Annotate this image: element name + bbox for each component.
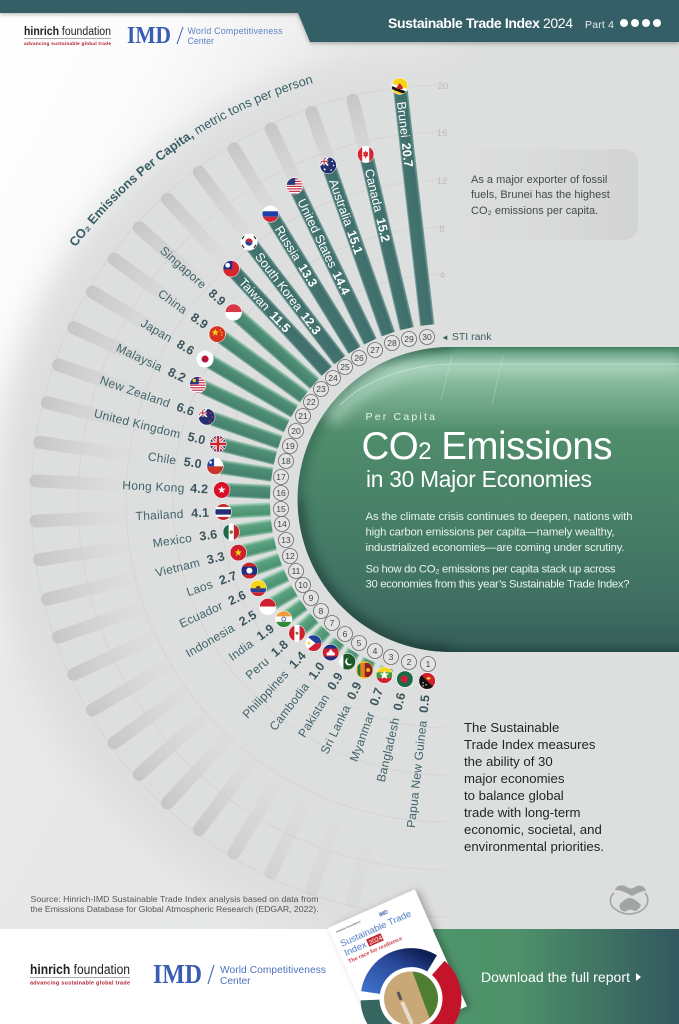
rank 8: [314, 604, 328, 618]
bar 29 Canada: Canada 15.2: [362, 168, 393, 243]
report cover: 2024: [368, 934, 384, 947]
pill body text: high carbon emissions per capita—namely wealthy,: [366, 526, 614, 538]
pill body text: So how do CO₂ emissions per capita stack up across: [366, 564, 616, 576]
footer logo: IMD: [153, 959, 326, 989]
index description text: major economies: [464, 771, 565, 786]
rank 1: [420, 656, 436, 672]
bar 22 China: China 8.9: [155, 286, 211, 332]
rank 12: [282, 548, 298, 564]
bar 29 Canada: [357, 146, 414, 330]
rank 28: 28: [387, 338, 397, 348]
rank 25: [338, 360, 352, 374]
bar 22 China: [159, 290, 308, 402]
bar 10 Indonesia: Indonesia 2.5: [183, 608, 259, 660]
scale labels: 8: [439, 224, 445, 235]
rank 3: [384, 650, 398, 664]
bar 9 India: India 1.9: [226, 621, 277, 664]
bar 21 Japan: [136, 312, 300, 421]
bar 6 Cambodia: [270, 637, 345, 730]
header title: Part 4: [585, 19, 614, 31]
pill body text: [366, 511, 632, 590]
panel: title pill: [298, 347, 679, 652]
rank 9: [304, 590, 318, 606]
pill kicker: Per Capita: [366, 411, 437, 423]
bar 13 Vietnam: Vietnam 3.3: [154, 549, 226, 580]
scale labels: 12: [437, 176, 447, 187]
header title: [388, 15, 661, 31]
rank 11: 11: [292, 566, 301, 576]
rank 6: [338, 626, 352, 642]
rank 7: 7: [330, 618, 335, 628]
callout: Brunei: As a major exporter of fossil: [471, 174, 607, 186]
rank 13: [278, 532, 294, 548]
rank 2: 2: [407, 657, 412, 667]
rank 10: 10: [298, 580, 308, 590]
footer: white band: [0, 929, 679, 1024]
pill body text: 30 economies from this year’s Sustainable Trade Index?: [366, 578, 630, 590]
bar 8 Peru: [245, 612, 319, 680]
icon: brand globe: [610, 885, 648, 914]
rank 27: [368, 342, 382, 358]
bar 16 Hong Kong: [123, 480, 270, 500]
rank 26: 26: [354, 353, 364, 363]
bar 24 Taiwan: [222, 260, 332, 376]
bar 25 South Korea: South Korea 12.3: [252, 250, 324, 337]
rank 13: 13: [281, 535, 291, 545]
bar 12 Laos: Laos 2.7: [185, 568, 239, 599]
bar 17 Chile: Chile 5.0: [147, 449, 203, 471]
rank 9: 9: [309, 593, 314, 603]
index description text: Trade Index measures: [464, 737, 596, 752]
bar 16 Hong Kong: Hong Kong 4.2: [122, 478, 209, 496]
bar 21 Japan: Japan 8.6: [138, 316, 197, 358]
rank 14: 14: [277, 519, 287, 529]
bar 26 Russia: Russia 13.3: [272, 223, 320, 289]
report cover: [328, 889, 467, 1024]
bar 14 Mexico: [153, 519, 273, 548]
rank 15: 15: [276, 504, 286, 514]
bar 4 Sri Lanka: [321, 656, 376, 754]
logo: IMD: World Competitiveness: [188, 26, 283, 36]
rank 5: [352, 636, 366, 650]
bar 28 Australia: [320, 156, 395, 336]
rank 2: [402, 654, 416, 670]
rank 20: 20: [291, 426, 301, 436]
footer logo: IMD: Center: [220, 976, 251, 987]
bar 7 Philippines: [242, 625, 331, 718]
bar 27 United States: [286, 177, 377, 345]
scale arcs: [31, 85, 447, 917]
bar 12 Laos: [186, 552, 282, 596]
bar 26 Russia: [262, 206, 360, 354]
source note: Source: Hinrich-IMD Sustainable Trade Index analysis based on data from: [30, 894, 318, 904]
rank 17: 17: [276, 472, 286, 482]
footer logo: hinrich foundation: hinrich foundation: [30, 962, 130, 977]
bar 20 Malaysia: [116, 344, 290, 432]
rank 26: [352, 350, 366, 366]
rank 24: 24: [328, 373, 338, 383]
rank 21: [296, 408, 310, 424]
bar 23 Singapore: Singapore 8.9: [157, 244, 228, 309]
scale labels: [437, 81, 448, 281]
logo: hinrich foundation: hinrich foundation: [24, 26, 111, 38]
rank 22: [304, 394, 318, 410]
bar 19 New Zealand: [100, 376, 282, 449]
chart title on arc: CO₂ Emissions Per Capita, metric tons per person: [70, 77, 313, 246]
rank 28: [384, 336, 400, 350]
bar 15 Thailand: Thailand 4.1: [135, 506, 210, 523]
logo: hinrich foundation: [24, 26, 111, 47]
bar 18 United Kingdom: United Kingdom 5.0: [92, 406, 207, 448]
bar 3 Myanmar: Myanmar 0.7: [347, 686, 386, 764]
rank 24: [326, 370, 340, 386]
source note: [30, 894, 318, 914]
rank 6: 6: [343, 629, 348, 639]
index description text: economic, societal, and: [464, 822, 602, 837]
bar 14 Mexico: Mexico 3.6: [152, 527, 218, 550]
pill heading: CO2 Emissions: [362, 425, 612, 468]
logo: IMD: IMD: [127, 23, 171, 49]
scale labels: 4: [439, 270, 445, 281]
bar 18 United Kingdom: [94, 409, 277, 465]
logo: IMD: Center: [188, 36, 214, 46]
bar 15 Thailand: [136, 502, 270, 520]
rank 30: 30: [422, 332, 432, 342]
bar 13 Vietnam: [154, 536, 277, 576]
bar 17 Chile: [148, 452, 273, 482]
report cover: Index: [343, 939, 369, 959]
bar 23 Singapore: [160, 247, 320, 389]
bar 8 Peru: Peru 1.8: [243, 637, 291, 682]
rank 16: [274, 486, 288, 500]
bar 19 New Zealand: New Zealand 6.6: [98, 373, 196, 419]
STI rank note: ◄ STI rank: [441, 331, 492, 343]
rank 29: 29: [404, 334, 414, 344]
rank 15: [274, 502, 288, 516]
rank 23: [314, 382, 328, 396]
rank 7: [324, 616, 340, 630]
index description text: [464, 720, 604, 854]
bar 5 Pakistan: Pakistan 0.9: [295, 670, 346, 740]
callout: Brunei: fuels, Brunei has the highest: [471, 189, 610, 201]
download call to action: Download the full report: [481, 969, 630, 985]
report cover: Sustainable Trade: [339, 909, 413, 950]
header band: [0, 0, 679, 42]
rank 1: 1: [426, 659, 431, 669]
rank 18: [278, 454, 294, 468]
rank 21: 21: [298, 411, 308, 421]
rank 19: 19: [285, 441, 295, 451]
callout: Brunei: CO₂ emissions per capita.: [471, 205, 598, 217]
bar 1 Papua New Guinea: Papua New Guinea 0.5: [404, 694, 433, 829]
rank 17: [274, 470, 288, 484]
report cover: hinrich foundation: [336, 919, 361, 934]
rank 5: 5: [357, 638, 362, 648]
bar 25 South Korea: [240, 234, 346, 364]
bar 2 Bangladesh: [376, 670, 414, 782]
bar 9 India: [228, 598, 308, 661]
rank 11: [288, 564, 304, 578]
header title: Sustainable Trade Index 2024: [388, 15, 573, 31]
rank 23: 23: [316, 384, 326, 394]
bar 4 Sri Lanka: Sri Lanka 0.9: [318, 679, 365, 756]
index description text: the ability of 30: [464, 754, 553, 769]
scale labels: 20: [438, 81, 448, 92]
bar 11 Ecuador: Ecuador 2.6: [177, 588, 248, 631]
rank 14: [274, 516, 290, 532]
rank badges: [274, 330, 436, 672]
bar 30 Brunei: Brunei 20.7: [394, 101, 415, 168]
rank 4: [368, 644, 382, 658]
rank 18: 18: [281, 456, 291, 466]
bar 10 Indonesia: [186, 584, 298, 658]
footer logo: hinrich foundation: [30, 962, 130, 986]
rank 27: 27: [370, 345, 380, 355]
logo: IMD: [127, 23, 283, 49]
index description text: trade with long-term: [464, 805, 581, 820]
bar 3 Myanmar: [350, 665, 394, 762]
pill body text: industrialized economies—are coming under scrutiny.: [366, 542, 624, 554]
callout: Brunei: [450, 149, 638, 240]
footer logo: IMD: IMD: [153, 959, 202, 989]
bar 28 Australia: Australia 15.1: [326, 177, 365, 256]
index description text: to balance global: [464, 788, 564, 803]
rank 22: 22: [306, 397, 316, 407]
rank 19: [282, 438, 298, 454]
rank 12: 12: [285, 551, 295, 561]
bar 6 Cambodia: Cambodia 1.0: [266, 659, 328, 733]
footer logo: IMD: World Competitiveness: [220, 965, 326, 976]
bar 2 Bangladesh: Bangladesh 0.6: [374, 691, 408, 783]
index description text: The Sustainable: [464, 720, 559, 735]
rank 25: 25: [340, 362, 350, 372]
logo: hinrich foundation: advancing sustainable global trade: [24, 41, 111, 47]
pill body text: As the climate crisis continues to deepen, nations with: [366, 511, 632, 523]
background ghost rays: [29, 93, 382, 909]
index description text: environmental priorities.: [464, 839, 604, 854]
bar 24 Taiwan: Taiwan 11.5: [236, 275, 293, 335]
source note: the Emissions Database for Global Atmospheric Research (EDGAR, 2022).: [30, 904, 318, 914]
rank 29: [402, 332, 416, 346]
bar 11 Ecuador: [179, 568, 290, 628]
bar 7 Philippines: Philippines 1.4: [240, 649, 309, 721]
report cover: The race for resilience: [348, 936, 403, 965]
bar 5 Pakistan: [298, 648, 360, 738]
rank 10: [296, 578, 310, 592]
rank 30: [420, 330, 434, 344]
rank 3: 3: [389, 652, 394, 662]
footer logo: hinrich foundation: advancing sustainable global trade: [30, 980, 130, 986]
report cover: IMD: [378, 909, 390, 919]
bar 30 Brunei: [389, 76, 436, 326]
bar 27 United States: United States 14.4: [294, 197, 353, 297]
scale labels: 16: [437, 128, 447, 139]
rank 4: 4: [373, 646, 378, 656]
pill subheading: in 30 Major Economies: [366, 466, 592, 492]
rank 16: 16: [276, 488, 286, 498]
rank 20: [288, 424, 304, 438]
footer: download band: [433, 929, 679, 1024]
rank 8: 8: [319, 606, 324, 616]
bar 20 Malaysia: Malaysia 8.2: [114, 341, 188, 385]
